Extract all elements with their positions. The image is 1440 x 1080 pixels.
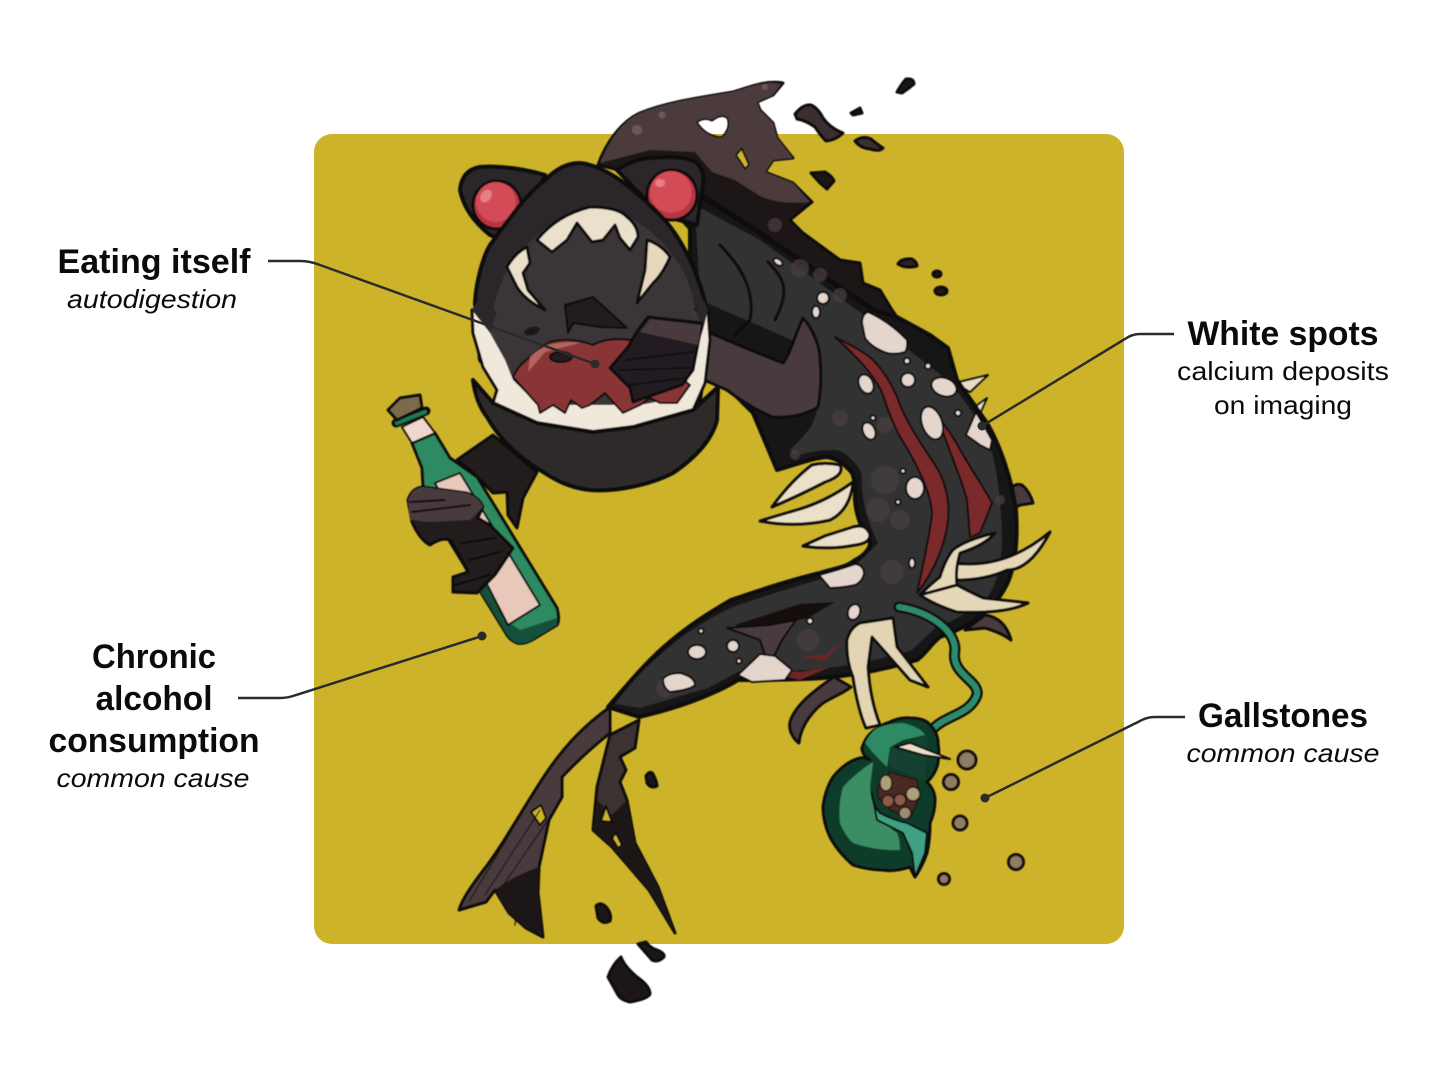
label [435,473,540,625]
sac top lit [865,723,925,767]
leader line: chronic alcohol [238,632,486,698]
label: eating itself [58,243,251,314]
back bump [1007,484,1033,510]
body limb lower left [790,677,851,743]
fold lines on neck [720,245,784,335]
leader line: eating itself [268,261,600,368]
body main surface [615,205,1002,708]
illustration: decaying pancreas creature [388,79,1050,1002]
right fang [637,240,670,303]
label: gallstones: common cause [1186,738,1380,768]
gallstones scattered [938,751,1024,884]
tongue [513,339,690,413]
label: chronic alcohol consumption: Chronic [92,638,216,676]
lower claws [847,618,928,728]
right claws [920,532,1050,612]
cork [388,395,422,420]
gallbladder [823,718,950,877]
torn tail gap [735,602,835,632]
flap [872,793,927,877]
yellow background panel [314,134,1124,944]
small dark patch on tongue [550,352,572,362]
tongue highlight [528,342,580,372]
skin mottling [656,218,1005,697]
arm stump in mouth [610,317,702,402]
opening [890,737,927,780]
small inner arm behind bottle [457,435,537,528]
label: chronic alcohol consumption [48,638,260,793]
left ear and right brow [460,157,703,237]
upper front teeth [537,207,638,252]
tissue chunk in mouth [565,297,627,333]
lower right fin [965,615,1011,640]
spikes on back [955,375,988,418]
tail torn flesh [727,620,796,660]
sac lit side [839,762,900,850]
label: gallstones [1186,697,1380,768]
label: chronic alcohol consumption: consumption [48,722,260,760]
cavity with stones [878,772,920,819]
dorsal fin with holes [598,82,957,380]
label: white spots: on imaging [1214,390,1352,420]
wound gash 2 [937,415,992,537]
label: chronic alcohol consumption: common cause [56,763,250,793]
label: white spots [1177,315,1389,420]
eyes [473,170,697,229]
outer head ring over the lip top [472,300,708,333]
flaking debris [596,79,947,1002]
body dark silhouette [608,190,1017,717]
leader line: white spots [978,334,1174,430]
leader line: gallstones [980,717,1185,802]
red slits on tail [760,640,844,680]
head dome [475,163,708,410]
hand gripping bottle [408,487,513,593]
mouth interior [490,208,703,405]
lower jaw [473,380,718,490]
label: eating itself: autodigestion [67,284,237,314]
white calcium spots [663,257,992,692]
label: white spots: White spots [1188,315,1378,353]
bone shard [895,743,950,759]
neck [402,417,435,443]
bottle ring [396,411,426,423]
dark glass side [423,485,557,643]
tail fin lower [593,720,675,933]
brown arm [700,318,821,417]
left upper claws [760,464,870,548]
back line [690,188,873,310]
wine bottle [388,395,558,643]
label: gallstones: Gallstones [1198,697,1368,735]
label: white spots: calcium deposits [1177,356,1389,386]
wound gash 1 [835,337,948,593]
tail fin upper [459,707,610,937]
bile duct [899,607,977,730]
small dark blob [523,325,541,337]
left fang [507,247,545,310]
label: eating itself: Eating itself [58,243,251,281]
label: chronic alcohol consumption: alcohol [96,680,212,718]
lower lip bone [472,310,710,432]
bottle glass [412,433,558,643]
gallbladder sac [823,718,939,877]
